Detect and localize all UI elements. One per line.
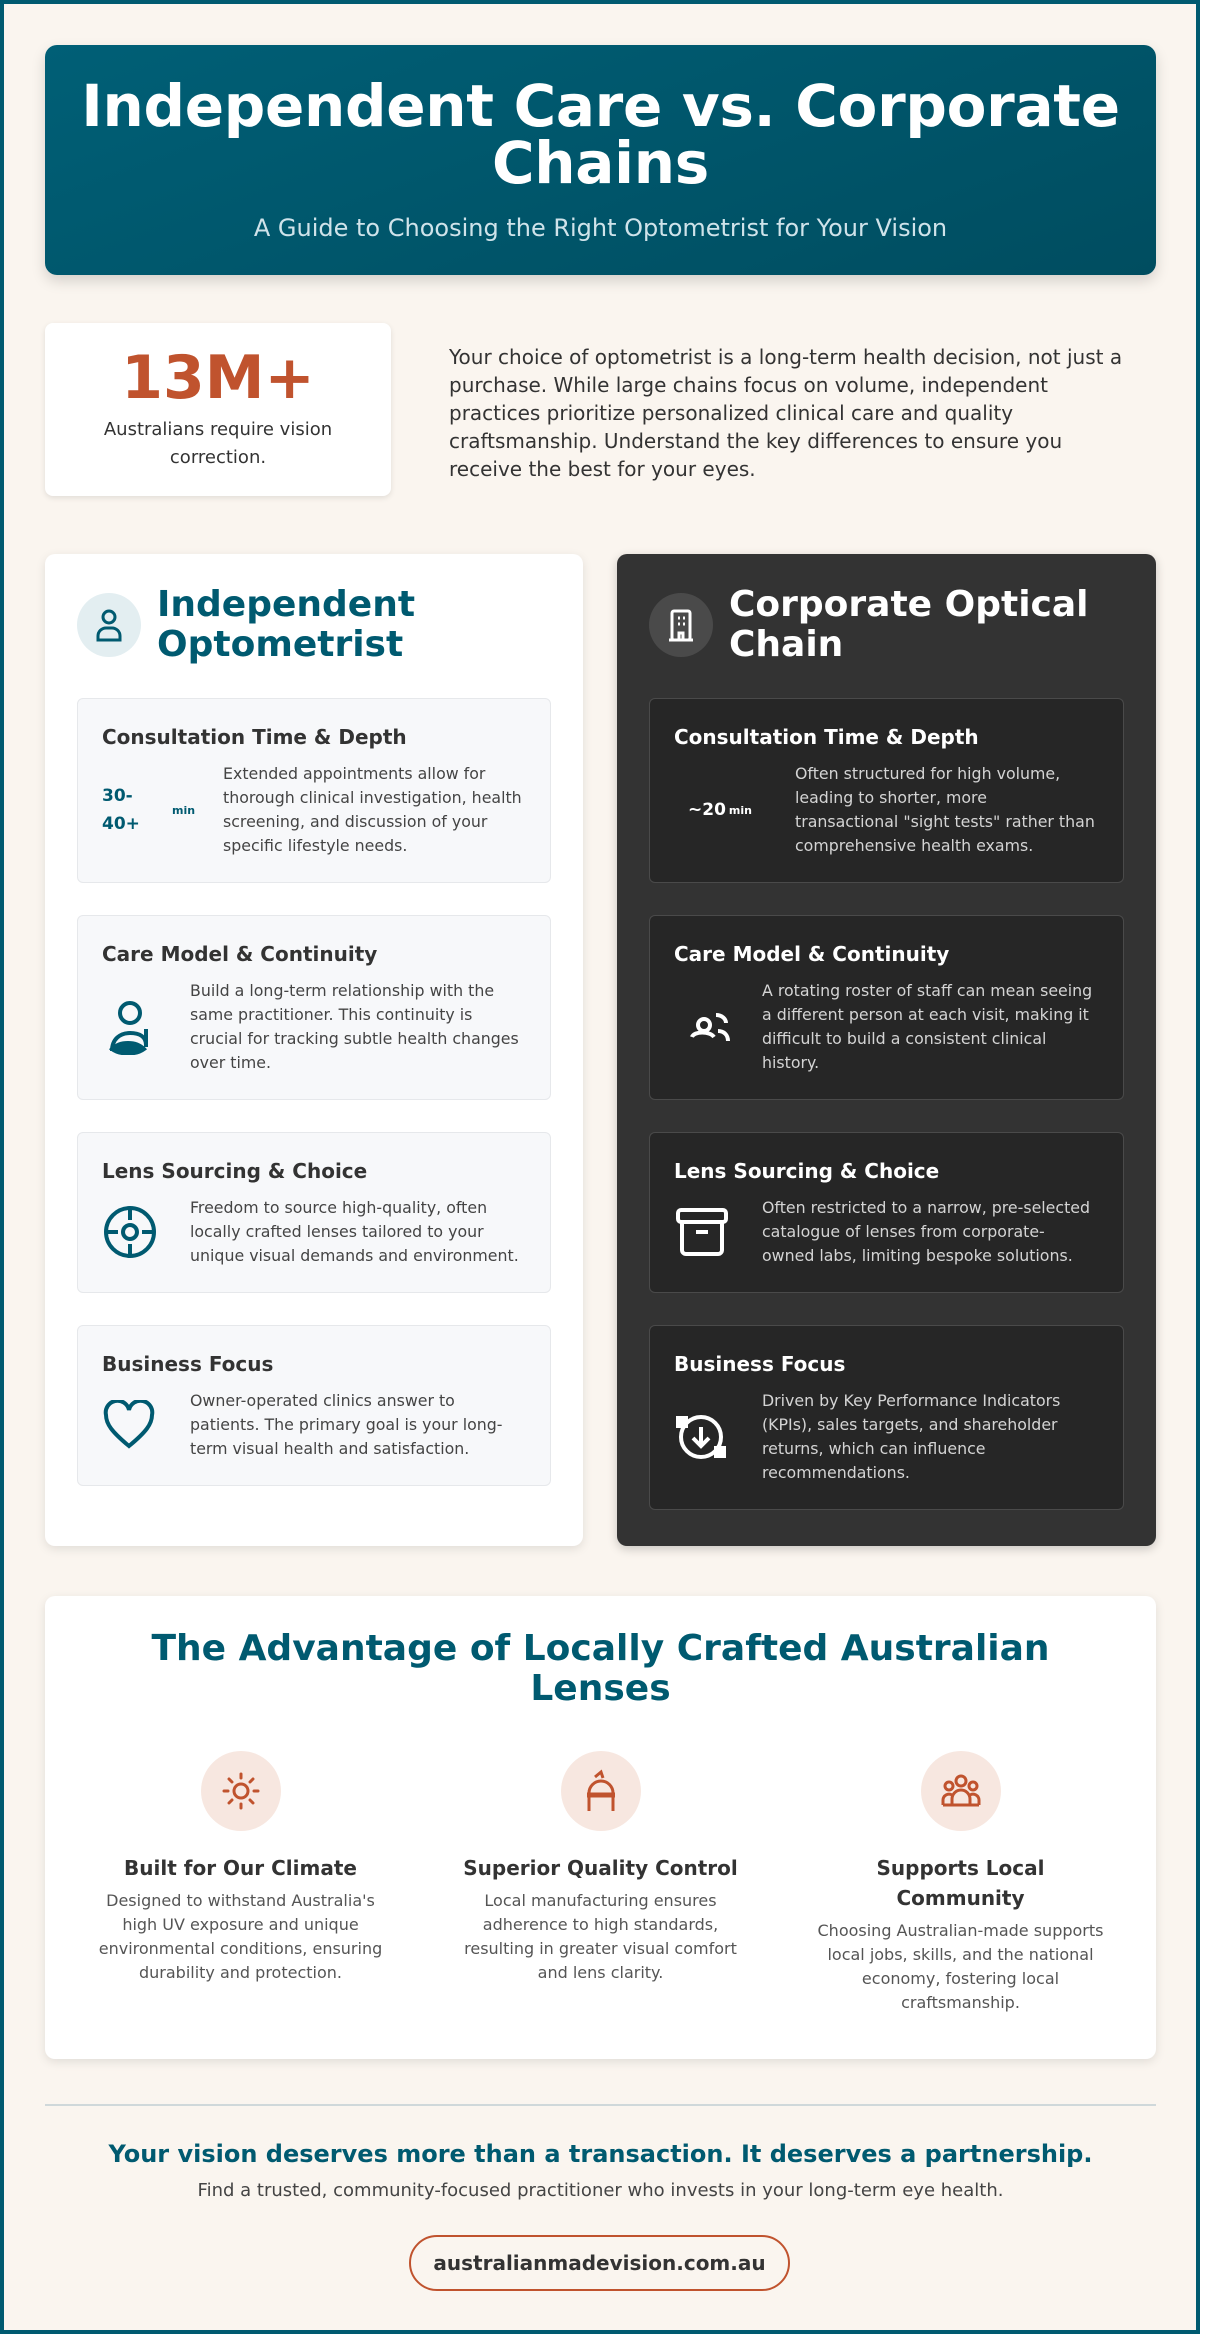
card: lens sourcing [649, 1132, 1124, 1293]
title [81, 72, 1120, 197]
card: lens sourcing [77, 1132, 551, 1293]
card: care model [649, 915, 1124, 1100]
item: quality: Superior Quality Control [463, 1856, 738, 1880]
panel title: Optometrist [157, 624, 403, 665]
subtitle: A Guide to Choosing the Right Optometrist for Your Vision [254, 214, 947, 242]
card: consultation: leading to shorter, more [795, 788, 987, 807]
card: consultation: 30- [102, 786, 133, 806]
card: consultation: Consultation Time & Depth [102, 725, 407, 749]
item: climate [99, 1751, 382, 1982]
item: community: Choosing Australian-made supports local jobs, skills, and the national economy, fostering local craftsmanship. [818, 1921, 1103, 2012]
card: lens sourcing: Lens Sourcing & Choice [102, 1159, 367, 1183]
card: lens sourcing: Freedom to source high-quality, often locally crafted lenses tailored to your unique visual demands and environment. [190, 1198, 519, 1265]
panel title: Corporate Optical [729, 584, 1089, 625]
panel title: Independent [157, 584, 415, 625]
card: business focus: Business Focus [102, 1352, 273, 1376]
card: care model: Care Model & Continuity [674, 942, 949, 966]
panel: advantage of local lenses [45, 1596, 1156, 2059]
stat caption: correction. [170, 447, 266, 468]
title: Chains [492, 129, 709, 197]
card: lens sourcing: Often restricted to a narrow, pre-selected catalogue of lenses from corporate-owned labs, limiting bespoke solutions. [762, 1198, 1090, 1265]
card: business focus [649, 1325, 1124, 1510]
item: climate: Designed to withstand Australia's high UV exposure and unique environmental conditions, ensuring durability and protection. [99, 1891, 382, 1982]
card: care model: Care Model & Continuity [102, 942, 377, 966]
item: community: Community [896, 1886, 1025, 1910]
panel title [729, 584, 1089, 665]
icon: group [920, 1751, 1000, 1831]
section title: Lenses [530, 1668, 671, 1709]
icon: building [649, 593, 713, 657]
item: community [818, 1751, 1103, 2012]
panel title: Chain [729, 624, 843, 665]
card: care model: A rotating roster of staff can mean seeing a different person at each visit, making it difficult to build a consistent clinical history. [762, 981, 1092, 1072]
button: website: australianmadevision.com.au [433, 2251, 766, 2275]
card: business focus [77, 1325, 551, 1486]
card: consultation: Often structured for high volume, [795, 764, 1060, 783]
card: care model: Build a long-term relationship with the same practitioner. This continuity is crucial for tracking subtle health changes over time. [190, 981, 519, 1072]
card: lens sourcing: Lens Sourcing & Choice [674, 1159, 939, 1183]
icon: person [77, 593, 141, 657]
card: business focus: Driven by Key Performance Indicators (KPIs), sales targets, and shareholder returns, which can influence recommendations. [762, 1391, 1060, 1482]
section title [151, 1628, 1050, 1709]
item: quality [463, 1751, 738, 1982]
intro text: Your choice of optometrist is a long-term health decision, not just a purchase. While large chains focus on volume, independent practices prioritize personalized clinical care and quality craftsmanship. Understand the key differences to ensure you receive the best for your eyes. [449, 345, 1122, 481]
card: business focus: Owner-operated clinics answer to patients. The primary goal is your long-term visual health and satisfaction. [190, 1391, 502, 1458]
card: consultation [77, 698, 551, 883]
card: consultation: ~20 [688, 800, 726, 820]
panel header [649, 584, 1089, 665]
item: quality: Local manufacturing ensures adherence to high standards, resulting in greater visual comfort and lens clarity. [464, 1891, 737, 1982]
card: consultation: min [729, 804, 752, 816]
card: business focus: Business Focus [674, 1352, 845, 1376]
stat card [45, 323, 391, 496]
panel title [157, 584, 415, 665]
card: consultation: min [172, 804, 195, 816]
header [45, 45, 1156, 275]
panel header [77, 584, 415, 665]
stat caption: Australians require vision [104, 419, 332, 440]
stat number: 13M+ [121, 343, 315, 413]
card: consultation: 40+ [102, 814, 140, 834]
card: consultation [649, 698, 1124, 883]
card: care model [77, 915, 551, 1100]
section title: The Advantage of Locally Crafted Australian [151, 1628, 1050, 1669]
card: consultation: Consultation Time & Depth [674, 725, 979, 749]
icon: sun [200, 1751, 280, 1831]
card: consultation: Extended appointments allow for thorough clinical investigation, health screening, and discussion of your specific lifestyle needs. [223, 764, 522, 855]
tagline: Your vision deserves more than a transaction. It deserves a partnership. [109, 2140, 1092, 2168]
title: Independent Care vs. Corporate [81, 72, 1120, 140]
item: climate: Built for Our Climate [124, 1856, 357, 1880]
item: community: Supports Local [876, 1856, 1044, 1880]
panel: corporate chain [617, 554, 1156, 1546]
stat caption [104, 419, 332, 468]
card: consultation: comprehensive health exams. [795, 836, 1033, 855]
panel: independent optometrist [45, 554, 583, 1546]
footer subtext: Find a trusted, community-focused practitioner who invests in your long-term eye health. [198, 2180, 1003, 2201]
icon: quality [560, 1751, 640, 1831]
button: website [409, 2235, 790, 2291]
card: consultation: transactional "sight tests" rather than [795, 812, 1095, 831]
